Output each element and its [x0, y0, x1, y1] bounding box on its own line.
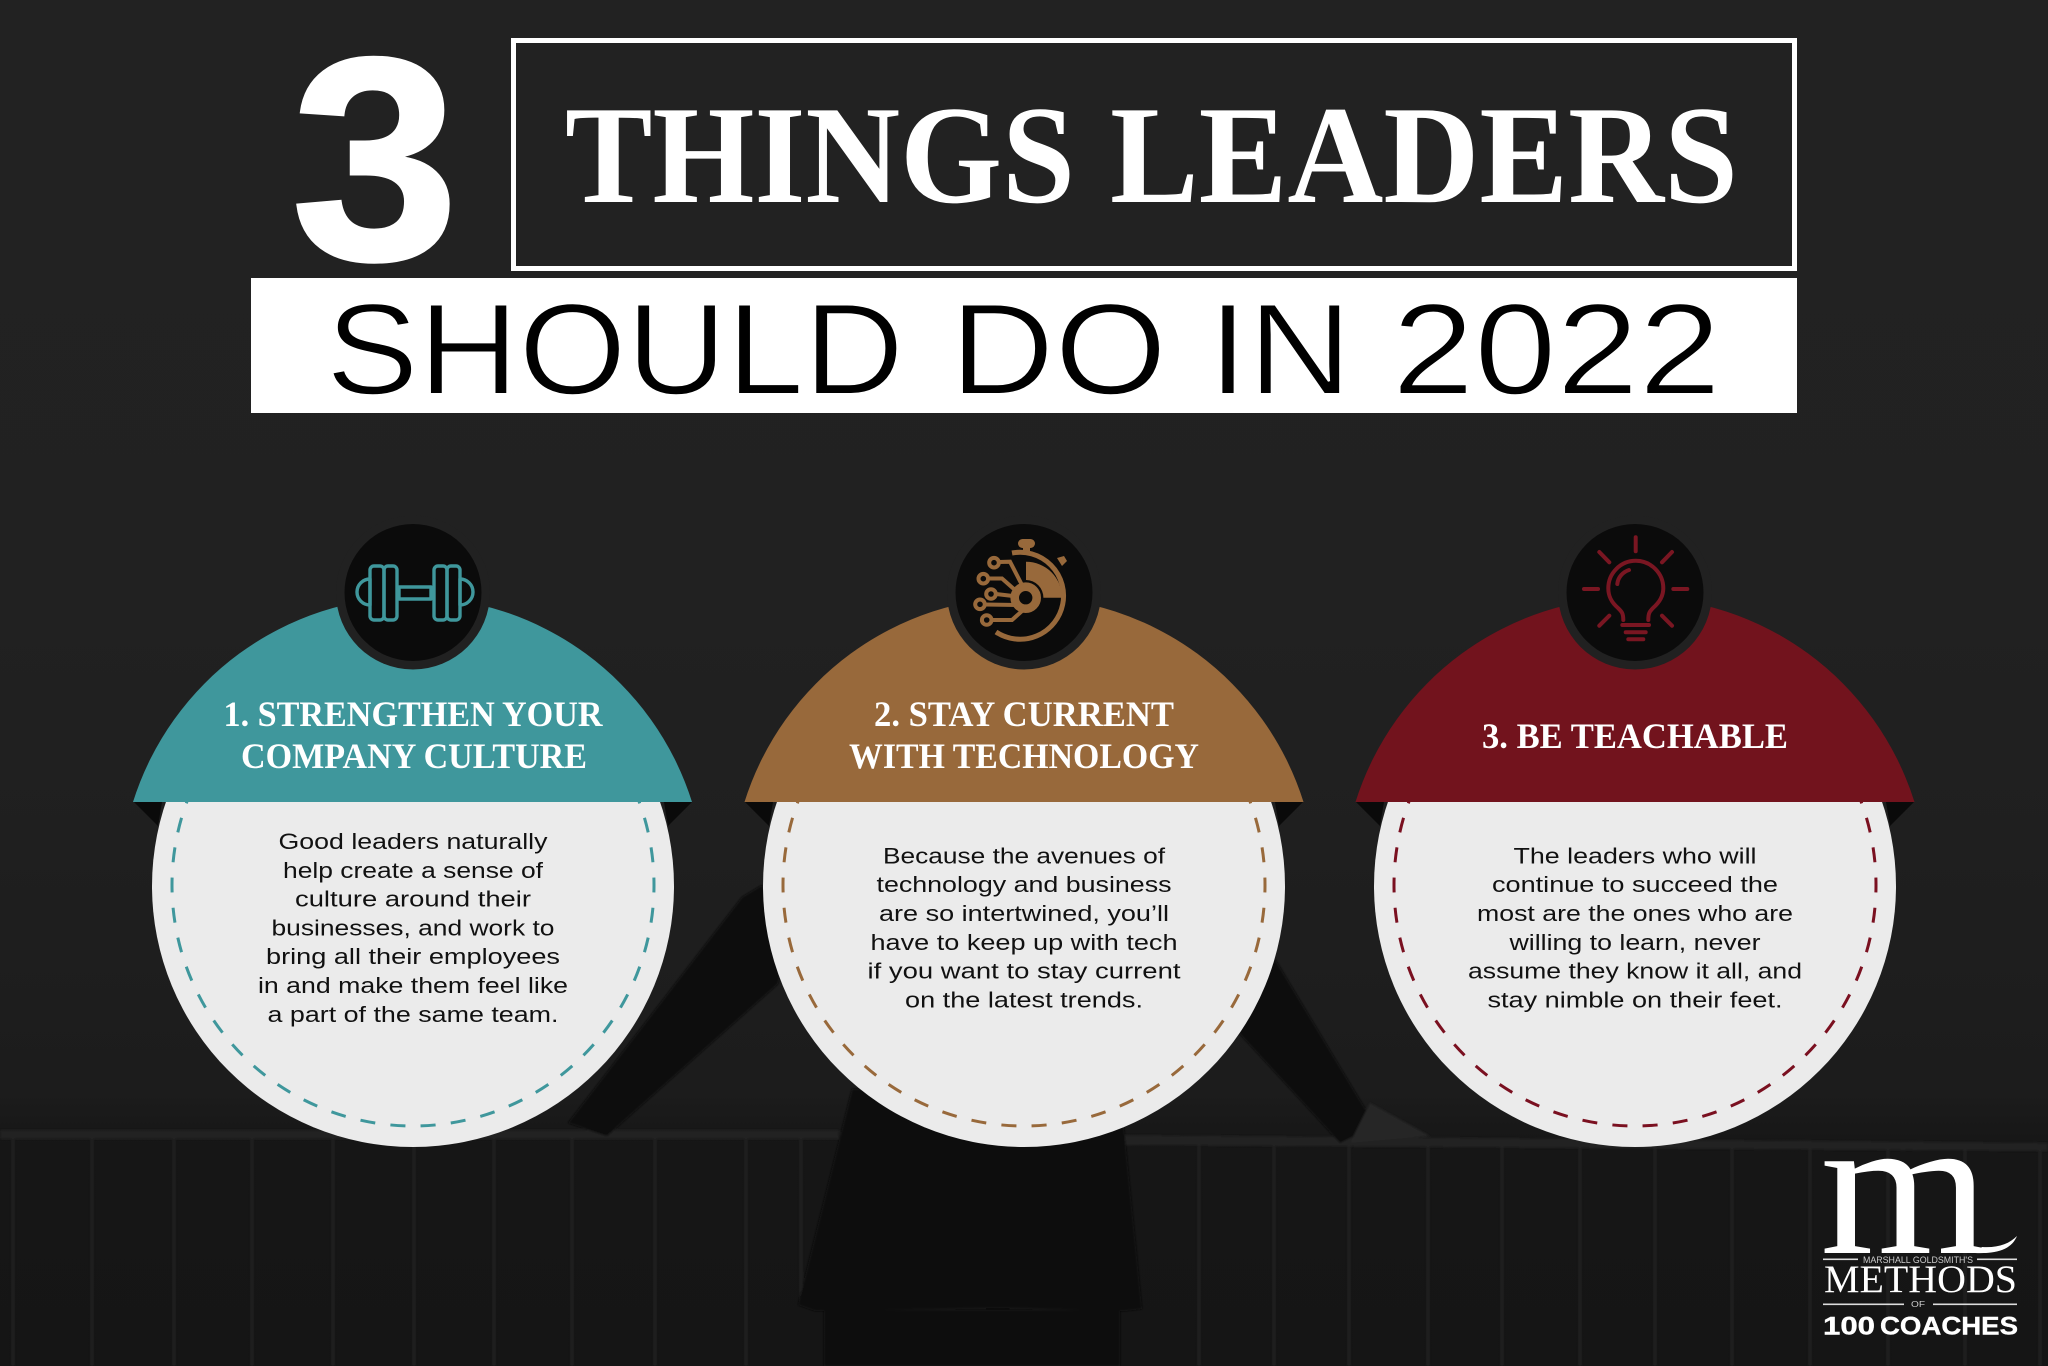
- logo: methods of 100 coaches: OF: [1911, 1300, 1925, 1309]
- text block: card 2 body: if you want to stay current: [868, 959, 1180, 984]
- text block: card 3 body: The leaders who will: [1514, 843, 1756, 868]
- title band: should do in 2022: [251, 276, 1797, 422]
- text block: card 1 body: businesses, and work to: [272, 915, 554, 940]
- text block: card 2 body: technology and business: [876, 872, 1172, 897]
- icon: stopwatch with circuit: [975, 539, 1067, 639]
- heading: card 2: 2. STAY CURRENT: [874, 694, 1174, 734]
- text block: card 3 body: willing to learn, never: [1508, 930, 1760, 955]
- text block: card 1 body: culture around their: [295, 887, 531, 912]
- title box: things leaders: THINGS: [565, 78, 1075, 233]
- text block: card 1 body: [258, 829, 568, 1027]
- text block: card 2 body: on the latest trends.: [905, 987, 1143, 1012]
- text block: card 3 body: most are the ones who are: [1477, 901, 1793, 926]
- panel: card 3 be teachable: [1356, 516, 1914, 1147]
- text block: card 1 body: Good leaders naturally: [278, 829, 548, 854]
- text block: card 3 body: assume they know it all, and: [1468, 959, 1802, 984]
- title box: things leaders: LEADERS: [1110, 78, 1738, 233]
- logo: methods of 100 coaches: 100: [1823, 1312, 1875, 1340]
- heading: card 2: [849, 694, 1199, 776]
- text block: card 2 body: have to keep up with tech: [870, 930, 1178, 955]
- logo: methods of 100 coaches: m: [1820, 1076, 1990, 1297]
- logo: methods of 100 coaches: COACHES: [1880, 1312, 2018, 1340]
- title box: things leaders: [514, 40, 1794, 268]
- icon: lightbulb: [1584, 537, 1687, 639]
- text block: card 1 body: a part of the same team.: [268, 1002, 558, 1027]
- panel: card 2 stay current with technology: [744, 516, 1304, 1147]
- title band: should do in 2022: IN: [1208, 276, 1352, 422]
- title band: should do in 2022: 2022: [1392, 276, 1721, 422]
- text block: card 3 body: continue to succeed the: [1492, 872, 1778, 897]
- logo: methods of 100 coaches: MARSHALL GOLDSMITH'S: [1863, 1255, 1973, 1266]
- text block: card 3 body: [1468, 843, 1802, 1012]
- text block: card 2 body: Because the avenues of: [883, 843, 1166, 868]
- title: number 3: 3: [291, 0, 459, 321]
- text block: card 2 body: are so intertwined, you’ll: [879, 901, 1169, 926]
- title band: should do in 2022: DO: [950, 276, 1167, 422]
- icon: dumbbell: [357, 566, 473, 620]
- panel: card 1 strengthen your company culture: [133, 516, 692, 1147]
- heading: card 1: COMPANY CULTURE: [241, 736, 587, 776]
- heading: card 1: [224, 694, 603, 776]
- text block: card 2 body: [868, 843, 1180, 1012]
- text block: card 1 body: help create a sense of: [283, 858, 544, 883]
- text block: card 1 body: in and make them feel like: [258, 973, 568, 998]
- title band: should do in 2022: SHOULD: [326, 276, 904, 422]
- logo: methods of 100 coaches: METHODS: [1824, 1258, 2017, 1301]
- heading: card 3: 3. BE TEACHABLE: [1482, 716, 1788, 756]
- text block: card 1 body: bring all their employees: [266, 944, 560, 969]
- heading: card 1: 1. STRENGTHEN YOUR: [224, 694, 603, 734]
- heading: card 2: WITH TECHNOLOGY: [849, 736, 1199, 776]
- logo: methods of 100 coaches: [1820, 1076, 2018, 1340]
- text block: card 3 body: stay nimble on their feet.: [1488, 987, 1782, 1012]
